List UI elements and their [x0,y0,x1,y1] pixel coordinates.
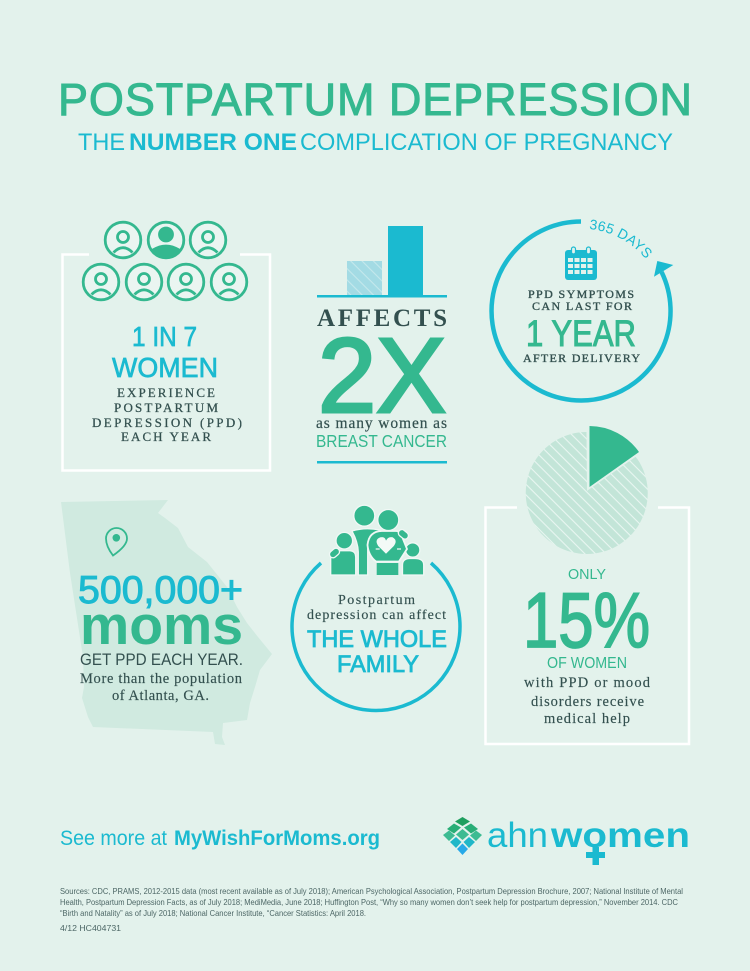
wordmark: ahn [487,816,548,855]
text: ppd symptoms can last for [528,287,634,313]
panel: affects 2x [316,226,447,464]
ring [292,563,460,710]
number: 1 year: 1 YEAR [526,313,636,354]
text: more than the population: More than the population [80,671,243,687]
number: 2x: 2X [318,317,446,435]
number: 500,000+: 500,000+ [78,569,243,612]
icon: map pin [106,528,127,556]
text: postpartum depression can affect [307,593,446,623]
sources: “Birth and Natality” as of July 2018; National Cancer Institute, “Cancer Statistics: April 2018. [60,908,366,918]
mother with baby [368,510,410,575]
text: with ppd or mood [524,675,651,727]
call to action: See more at [60,827,167,850]
panel: 15 percent [486,426,689,744]
number: 15%: 15% [523,576,650,664]
text: postpartum depression can affect: Postpartum [338,593,415,608]
icon: group of seven women [83,222,247,300]
text: ppd symptoms can last for: CAN LAST FOR [532,299,632,313]
text: postpartum depression can affect: depression can affect [307,608,446,623]
sources: 4/12 HC404731 [60,923,121,933]
icon: family [328,505,424,575]
text: get ppd each year: GET PPD EACH YEAR. [80,651,243,669]
panel: 1 in 7 women [62,222,270,470]
bar chart [317,226,447,298]
text: more than the population: of Atlanta, GA. [112,688,209,704]
subtitle: NUMBER ONE [129,129,297,156]
text: with ppd or mood: with PPD or mood [524,675,651,691]
text: ppd symptoms can last for: PPD SYMPTOMS [528,287,634,301]
subtitle [78,129,673,156]
heading: 1 in 7 women: 1 IN 7 [132,321,197,352]
text: experience postpartum depression: DEPRESSION (PPD) [92,415,242,430]
heading: moms: moms [80,594,243,656]
call to action [60,827,380,850]
heading: affects: AFFECTS [317,305,447,332]
text: experience postpartum depression: EXPERIENCE [117,385,215,400]
heading: the whole family: THE WHOLE [307,626,447,653]
arrow: year circle [492,222,673,400]
heading: the whole family: FAMILY [337,651,419,678]
text: experience postpartum depression: EACH YEAR [121,429,211,444]
title: POSTPARTUM DEPRESSION [58,74,692,125]
heading: 1 in 7 women: WOMEN [112,352,218,383]
text: more than the population [80,671,243,704]
subtitle: THE [78,129,125,156]
panel: georgia [61,500,272,745]
pie chart [526,426,648,554]
wordmark: women [550,816,690,855]
wordmark [487,816,690,855]
text: with ppd or mood: medical help [544,711,630,727]
label: 365 days: 365 DAYS [590,220,652,258]
icon: venus cross [586,847,605,865]
heading: the whole family [307,626,447,678]
text: experience postpartum depression [92,385,242,444]
subtitle: COMPLICATION OF PREGNANCY [300,129,673,156]
text: experience postpartum depression: POSTPARTUM [114,400,218,415]
icon: calendar [565,247,597,280]
panel: whole family [292,505,460,710]
text: as many women as: as many women as [316,415,447,432]
logo: ahn women [443,816,690,865]
call to action: MyWishForMoms.org [174,827,380,850]
text: with ppd or mood: disorders receive [531,694,644,710]
sources [60,886,683,933]
heading: 1 in 7 women [112,321,218,383]
panel: 365 days [489,219,674,403]
map of georgia [61,500,272,745]
icon: logo mark [443,817,482,855]
text: of women: OF WOMEN [547,655,627,672]
text: only: ONLY [568,566,606,583]
text: after delivery: AFTER DELIVERY [523,351,640,365]
text: breast cancer: BREAST CANCER [316,431,447,451]
